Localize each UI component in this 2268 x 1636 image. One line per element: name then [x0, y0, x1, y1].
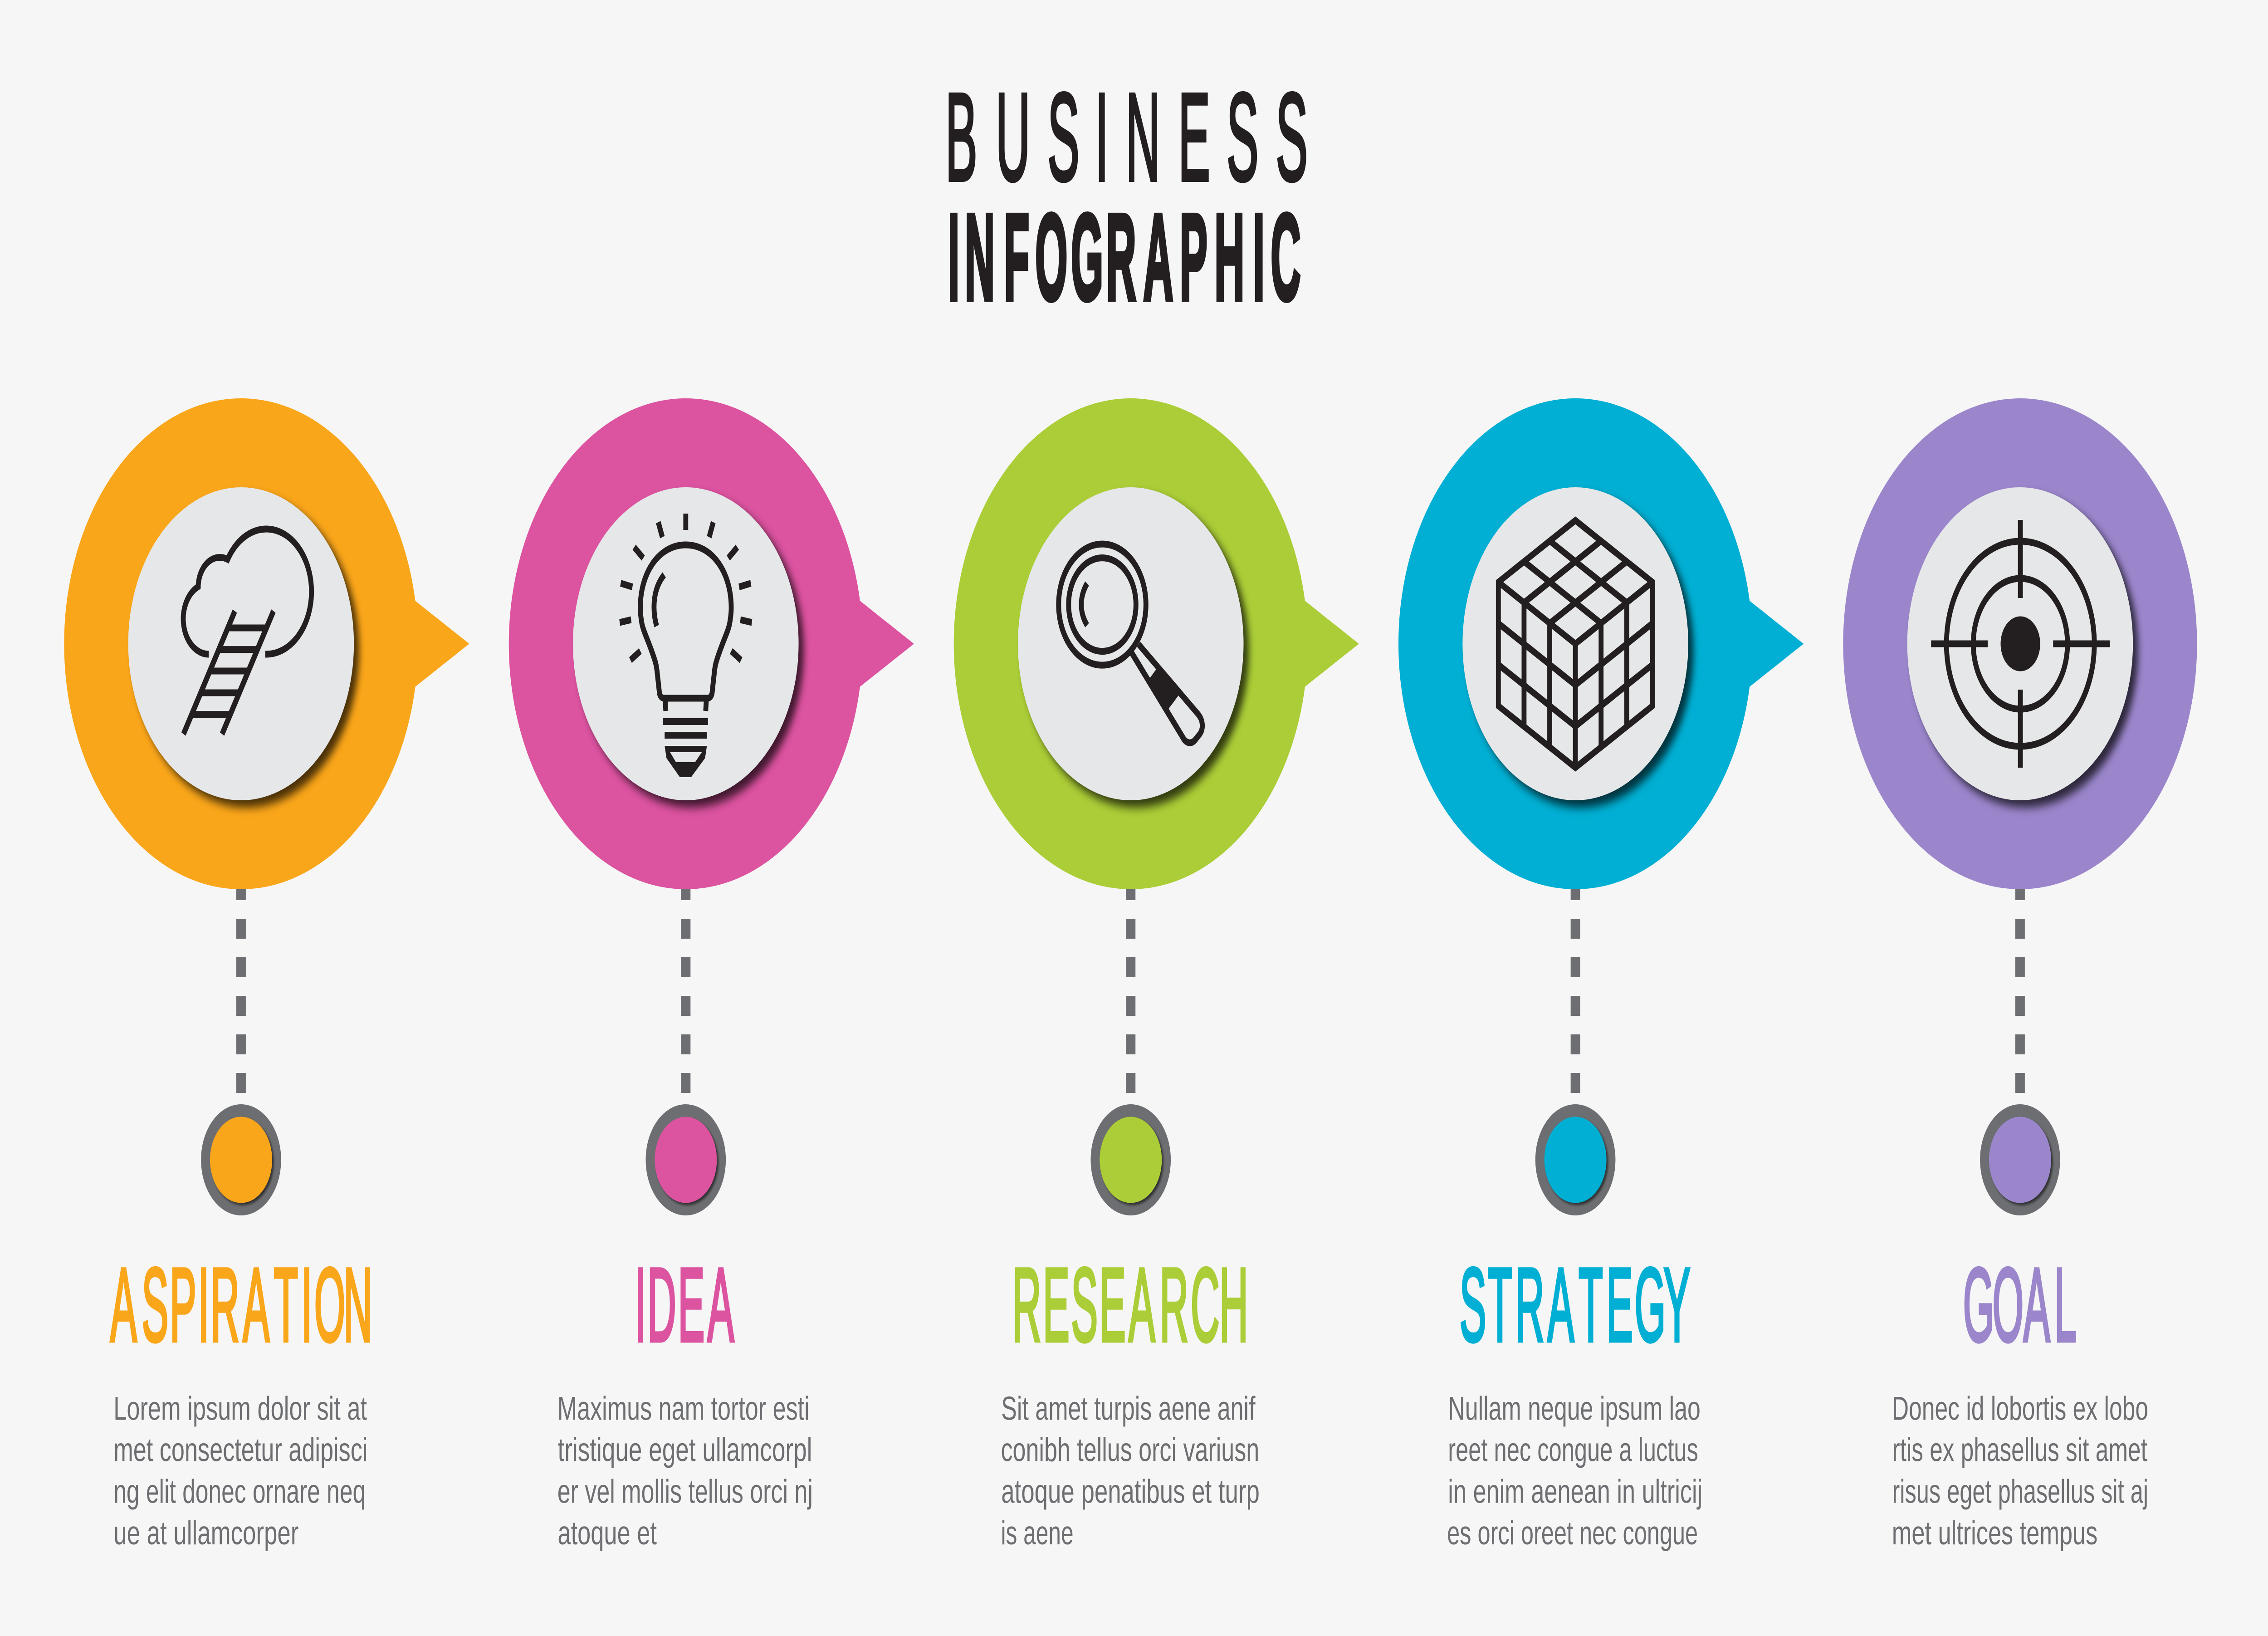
- heading: GOAL: [1963, 1246, 2077, 1363]
- icon: cloud and ladder: [183, 529, 312, 734]
- heading: STRATEGY: [1460, 1246, 1690, 1363]
- body text: ue at ullamcorper: [113, 1515, 298, 1552]
- dotted connector: [679, 880, 692, 1093]
- body text: met ultrices tempus: [1892, 1515, 2097, 1552]
- body text: is aene: [1001, 1515, 1074, 1552]
- inner disc shadow: [133, 495, 359, 808]
- pointer bubble: [954, 398, 1359, 889]
- body text: Sit amet turpis aene anif: [1001, 1390, 1256, 1427]
- body text: atoque et: [557, 1515, 657, 1552]
- icon: light bulb: [620, 514, 752, 777]
- inner disc: [573, 487, 799, 800]
- inner disc: [128, 487, 354, 800]
- icon: target: [1931, 520, 2110, 768]
- heading: ASPIRATION: [110, 1246, 372, 1363]
- icon: magnifying glass: [1059, 544, 1202, 743]
- body text: er vel mollis tellus orci nj: [557, 1473, 813, 1510]
- inner disc: [1018, 487, 1244, 800]
- bubble: [1843, 398, 2197, 889]
- body text: risus eget phasellus sit aj: [1892, 1473, 2148, 1510]
- panel: goal: [1843, 398, 2197, 1552]
- dotted connector: [235, 880, 248, 1093]
- node: [655, 1117, 719, 1205]
- body text: reet nec congue a luctus: [1448, 1431, 1698, 1469]
- inner disc: [1462, 487, 1688, 800]
- inner disc shadow: [578, 495, 804, 808]
- body text: [1892, 1390, 2148, 1552]
- node: [1989, 1117, 2053, 1205]
- body text: atoque penatibus et turp: [1001, 1473, 1260, 1510]
- panel: idea: [509, 398, 914, 1552]
- body text: [557, 1390, 813, 1552]
- node shadow: [1090, 1104, 1171, 1215]
- panel: strategy: [1398, 398, 1804, 1552]
- panel: research: [954, 398, 1359, 1552]
- inner disc shadow: [1468, 495, 1693, 808]
- panel: aspiration: [64, 398, 469, 1552]
- inner disc shadow: [1912, 495, 2138, 808]
- title line: INFOGRAPHIC: INFOGRAPHIC: [948, 189, 1301, 326]
- heading: RESEARCH: [1012, 1246, 1248, 1363]
- body text: tristique eget ullamcorpl: [557, 1431, 812, 1469]
- node: [1545, 1117, 1608, 1205]
- body text: Lorem ipsum dolor sit at: [113, 1390, 367, 1427]
- pointer bubble: [509, 398, 914, 889]
- body text: Donec id lobortis ex lobo: [1892, 1390, 2148, 1427]
- dotted connector: [1124, 880, 1137, 1093]
- inner disc: [1907, 487, 2133, 800]
- title line: BUSINESS: BUSINESS: [945, 68, 1308, 207]
- body text: [1001, 1390, 1260, 1552]
- title: [945, 68, 1308, 326]
- body text: conibh tellus orci variusn: [1001, 1431, 1259, 1469]
- node shadow: [201, 1104, 281, 1215]
- icon: cube: [1498, 520, 1652, 768]
- node shadow: [645, 1104, 726, 1215]
- body text: Nullam neque ipsum lao: [1448, 1390, 1701, 1427]
- pointer bubble: [64, 398, 469, 889]
- body text: [113, 1390, 367, 1552]
- inner disc shadow: [1023, 495, 1249, 808]
- body text: in enim aenean in ultricij: [1448, 1473, 1702, 1510]
- dotted connector: [2014, 880, 2027, 1093]
- heading: IDEA: [635, 1246, 734, 1363]
- body text: met consectetur adipisci: [113, 1431, 367, 1469]
- body text: [1447, 1390, 1702, 1552]
- pointer bubble: [1398, 398, 1804, 889]
- body text: Maximus nam tortor esti: [557, 1390, 810, 1427]
- node shadow: [1535, 1104, 1615, 1215]
- body text: rtis ex phasellus sit amet: [1892, 1431, 2147, 1469]
- node: [1100, 1117, 1163, 1205]
- body text: es orci oreet nec congue: [1447, 1515, 1698, 1552]
- node shadow: [1980, 1104, 2060, 1215]
- dotted connector: [1569, 880, 1582, 1093]
- body text: ng elit donec ornare neq: [113, 1473, 366, 1510]
- node: [210, 1117, 274, 1205]
